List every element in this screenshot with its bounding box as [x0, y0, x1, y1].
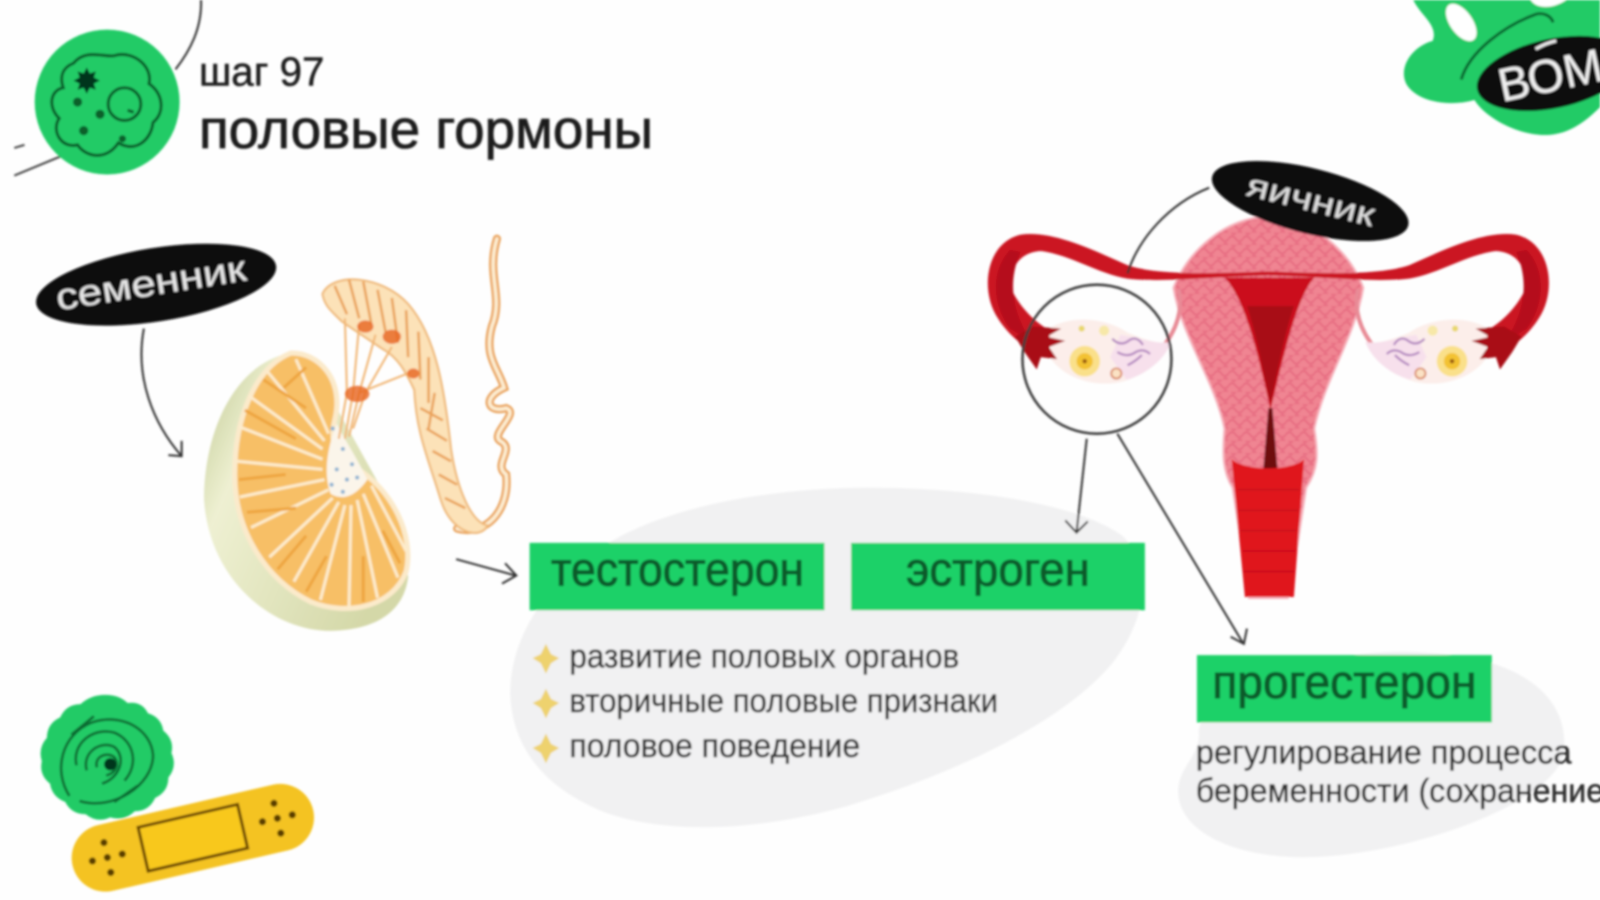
- lobule lines: [237, 359, 406, 608]
- vagina: [1232, 459, 1304, 597]
- grey blob behind progesterone: [1178, 652, 1564, 857]
- arrow: testis to testosterone: [456, 559, 516, 584]
- list: effects: [533, 638, 998, 765]
- text: progesterone function: регулирование процесса: [1196, 734, 1572, 771]
- illustration: uterus: [988, 216, 1549, 598]
- cervical canal: [1263, 408, 1278, 469]
- cut face: [235, 353, 408, 608]
- zoom circle on ovary: [1022, 285, 1171, 434]
- hormone tag: testosterone: [530, 543, 824, 610]
- hormone tag: estrogen: [851, 543, 1145, 610]
- bullet icons: [533, 644, 559, 763]
- outer shell: [204, 352, 408, 631]
- right tube and ovary: [1268, 234, 1549, 384]
- mediastinum: [327, 423, 367, 497]
- item one: развитие половых органов: [569, 638, 959, 675]
- hormone tag: testosterone: тестостерон: [551, 544, 804, 596]
- label: ovary: яичник: [1243, 166, 1380, 234]
- hormone tag: progesterone: прогестерон: [1212, 656, 1477, 708]
- arrow: ovary to estrogen: [1065, 439, 1088, 533]
- main heading: половые гормоны: [199, 98, 653, 160]
- left tube and ovary: [988, 234, 1268, 384]
- connector: ovary label: [1128, 188, 1209, 273]
- arrow: ovary to progesterone: [1117, 434, 1247, 644]
- title: [199, 49, 653, 160]
- arrow: testis label to testis: [141, 329, 182, 456]
- epididymis: [322, 279, 488, 533]
- icon: spiral badge: [41, 695, 174, 820]
- vas deferens tube: [457, 239, 510, 530]
- label: testis: [30, 229, 282, 340]
- label: ovary: [1204, 145, 1416, 257]
- icon: yellow bandage: [65, 777, 321, 898]
- grey blob behind hormones: [510, 488, 1143, 827]
- item three: половое поведение: [569, 728, 860, 765]
- icon: green cell badge: [14, 0, 201, 176]
- illustration: testis: [204, 239, 510, 631]
- icon: green vom badge: [1404, 0, 1600, 135]
- rete tubules: [339, 318, 410, 439]
- uterine body: [1173, 216, 1363, 598]
- text: progesterone function: [1196, 734, 1600, 810]
- cavity: [1224, 278, 1314, 410]
- label: testis: семенник: [53, 247, 250, 318]
- item two: вторичные половые признаки: [569, 683, 998, 720]
- hormone tag: estrogen: эстроген: [906, 544, 1090, 596]
- step label: шаг 97: [199, 49, 324, 95]
